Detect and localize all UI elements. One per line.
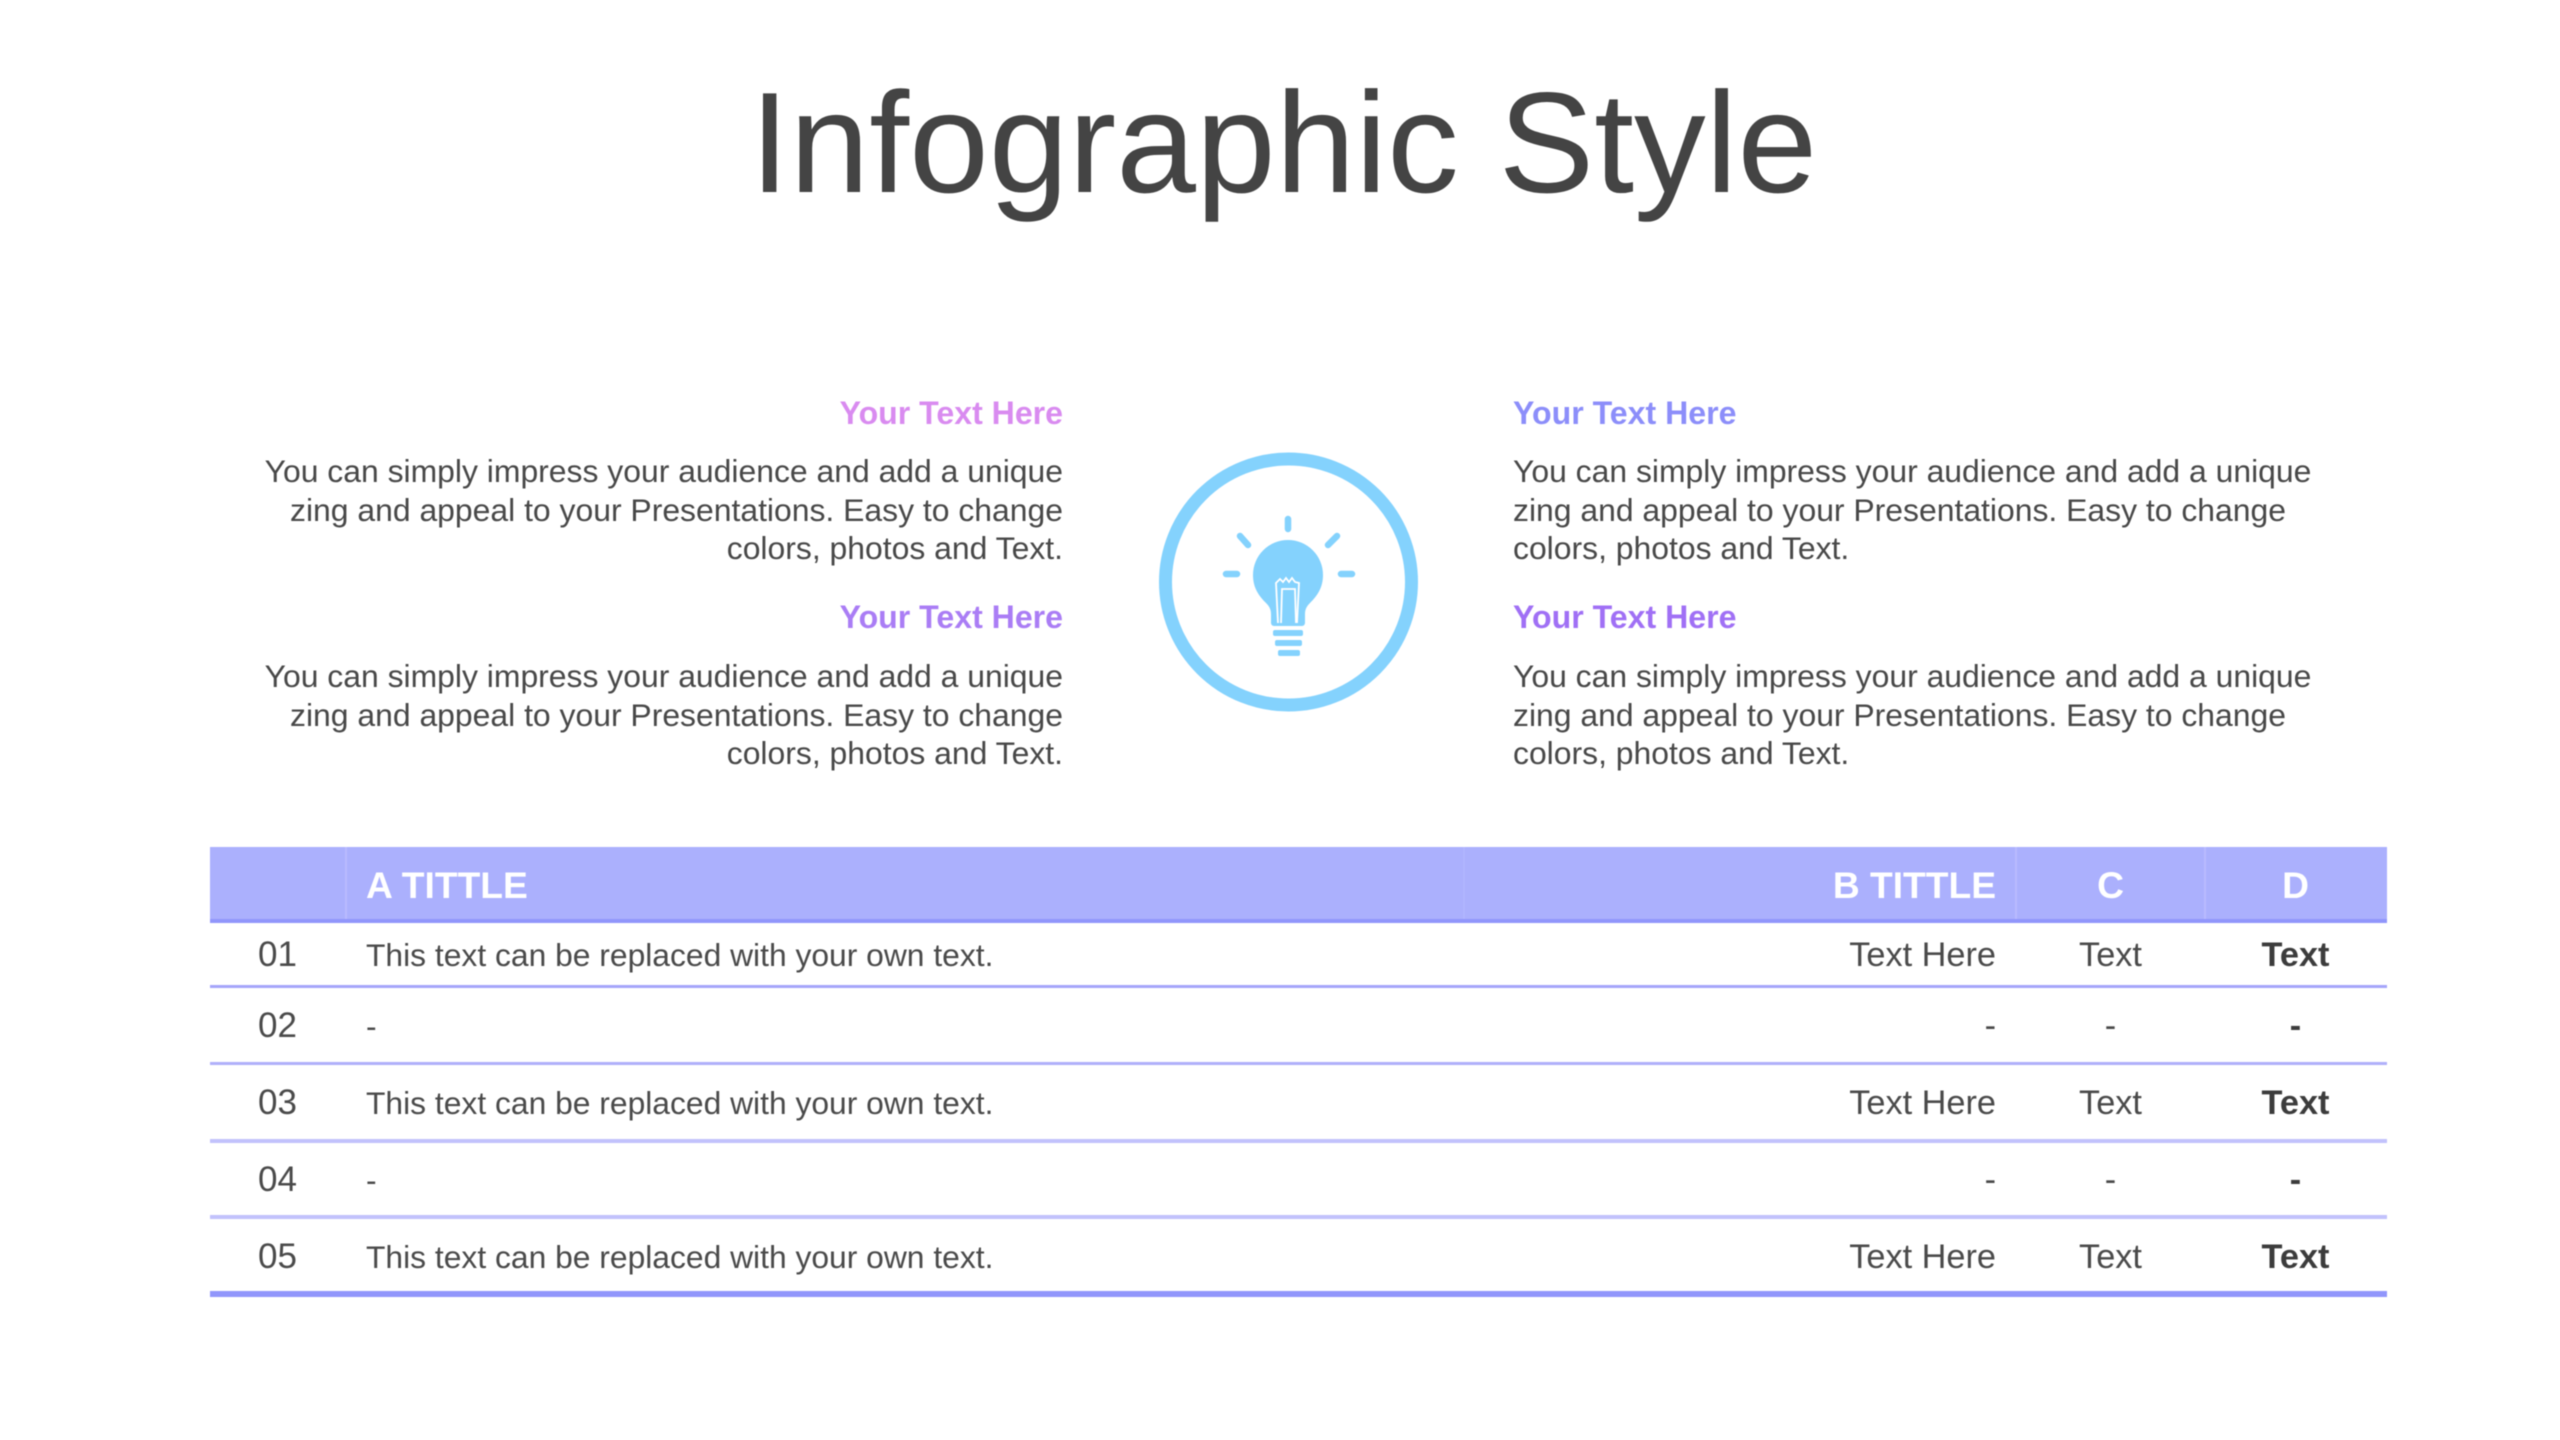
text block: top right bbox=[1513, 395, 2311, 566]
header: C: C bbox=[2097, 864, 2124, 906]
row 01: Text bbox=[2262, 936, 2329, 974]
body: bottom right: You can simply impress your audience and add a unique bbox=[1513, 658, 2311, 694]
row 05: Text bbox=[2079, 1238, 2142, 1276]
row 02: 02 bbox=[258, 1006, 297, 1045]
row 03: This text can be replaced with your own text. bbox=[366, 1085, 993, 1121]
body: bottom right: zing and appeal to your Presentations. Easy to change bbox=[1513, 696, 2286, 732]
row 02 bbox=[258, 1006, 2301, 1045]
row 01: Text Here bbox=[1849, 936, 1996, 974]
body: top left: colors, photos and Text. bbox=[727, 530, 1063, 566]
body: bottom left bbox=[265, 658, 1063, 772]
row 04: - bbox=[366, 1162, 377, 1198]
row 01: This text can be replaced with your own text. bbox=[366, 937, 993, 973]
heading: top left: Your Text Here bbox=[840, 395, 1063, 431]
row 01: Text bbox=[2079, 936, 2142, 974]
row 03 bbox=[258, 1083, 2330, 1122]
row 03: Text Here bbox=[1849, 1084, 1996, 1122]
row 04: - bbox=[2290, 1161, 2301, 1199]
row 03: Text bbox=[2262, 1084, 2329, 1122]
row 05: Text Here bbox=[1849, 1238, 1996, 1276]
body: top right bbox=[1513, 453, 2311, 566]
body: bottom left: You can simply impress your audience and add a unique bbox=[265, 658, 1063, 694]
row 03: 03 bbox=[258, 1083, 297, 1122]
table bbox=[209, 846, 2388, 924]
row 02: - bbox=[2105, 1007, 2116, 1045]
row 04: - bbox=[2105, 1161, 2116, 1199]
body: top right: zing and appeal to your Presentations. Easy to change bbox=[1513, 492, 2286, 528]
body: bottom left: colors, photos and Text. bbox=[727, 735, 1063, 771]
header: D: D bbox=[2282, 864, 2309, 906]
row 05: This text can be replaced with your own text. bbox=[366, 1239, 993, 1275]
text block: bottom right bbox=[1513, 599, 2311, 772]
heading: bottom left: Your Text Here bbox=[840, 599, 1063, 635]
row 04 bbox=[258, 1160, 2301, 1199]
header: B TITTLE: B TITTLE bbox=[1833, 864, 1996, 906]
row 05 bbox=[258, 1237, 2330, 1276]
row 02: - bbox=[2290, 1007, 2301, 1045]
body: top right: colors, photos and Text. bbox=[1513, 530, 1849, 566]
row 02: - bbox=[366, 1008, 377, 1044]
row 03: Text bbox=[2079, 1084, 2142, 1122]
row 01: 01 bbox=[258, 935, 297, 974]
header: A TITTLE: A TITTLE bbox=[366, 864, 528, 906]
table header row bbox=[210, 847, 2387, 923]
icon: light bulb in circle bbox=[1158, 452, 1419, 712]
body: top left bbox=[265, 453, 1063, 566]
title: Infographic Style bbox=[750, 63, 1817, 223]
body: top left: zing and appeal to your Presentations. Easy to change bbox=[290, 492, 1063, 528]
row 05: Text bbox=[2262, 1238, 2329, 1276]
body: bottom right: colors, photos and Text. bbox=[1513, 735, 1849, 771]
body: top left: You can simply impress your audience and add a unique bbox=[265, 453, 1063, 489]
body: top right: You can simply impress your audience and add a unique bbox=[1513, 453, 2311, 489]
heading: top right: Your Text Here bbox=[1513, 395, 1736, 431]
row 04: 04 bbox=[258, 1160, 297, 1199]
row 01 bbox=[258, 935, 2330, 974]
row 04: - bbox=[1985, 1161, 1996, 1199]
text block: top left bbox=[265, 395, 1063, 566]
body: bottom left: zing and appeal to your Presentations. Easy to change bbox=[290, 696, 1063, 732]
text block: bottom left bbox=[265, 599, 1063, 772]
body: bottom right bbox=[1513, 658, 2311, 772]
heading: bottom right: Your Text Here bbox=[1513, 599, 1736, 635]
row 02: - bbox=[1985, 1007, 1996, 1045]
row 05: 05 bbox=[258, 1237, 297, 1276]
